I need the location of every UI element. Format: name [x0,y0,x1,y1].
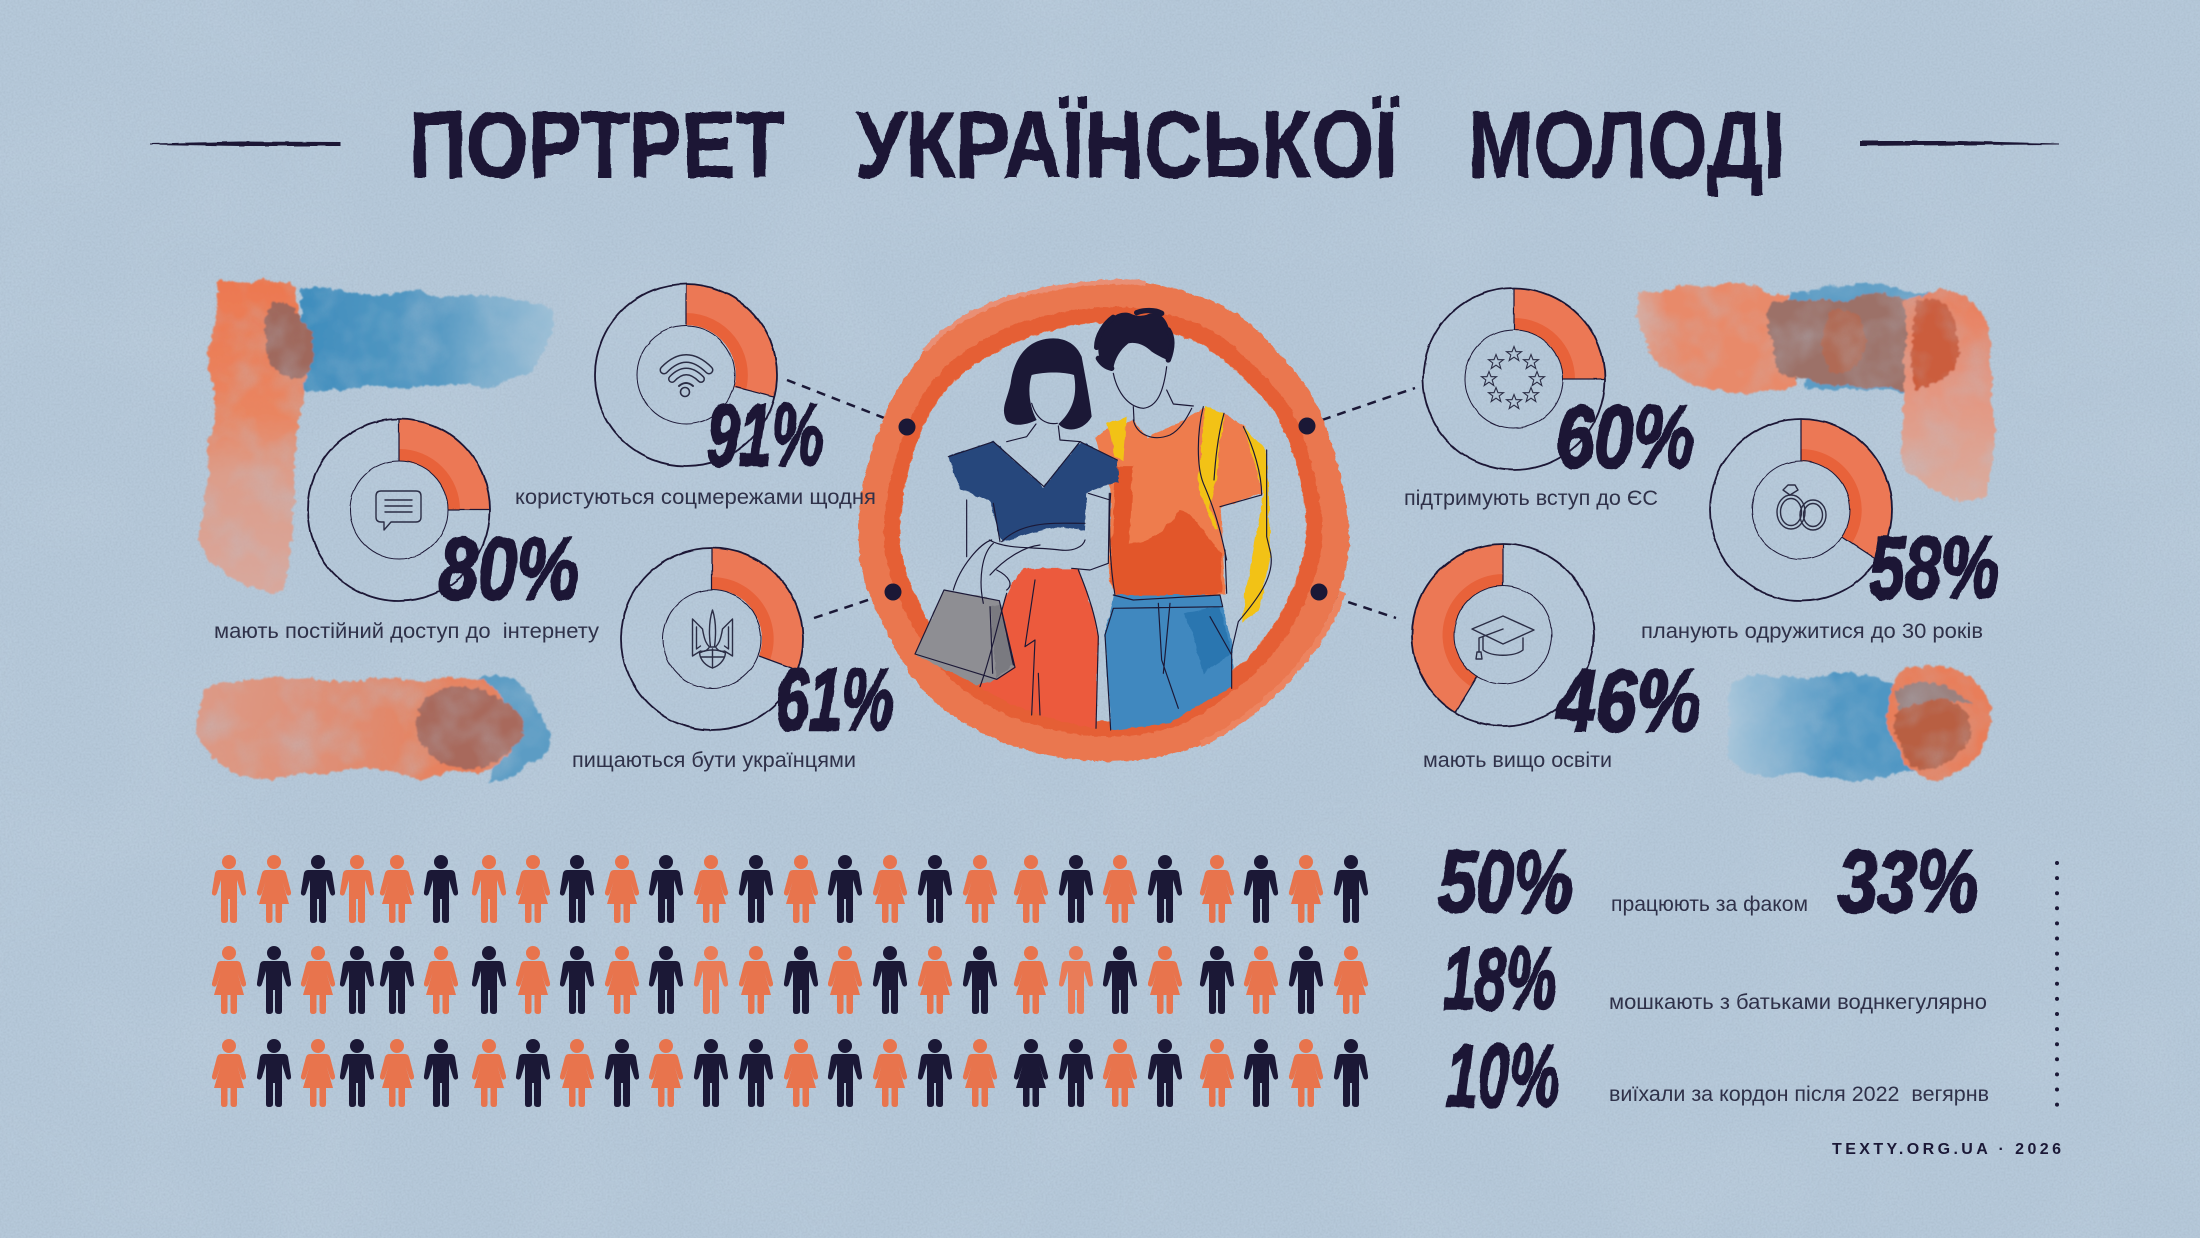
pictogram row 3 [212,1039,1368,1107]
title rule right [1860,141,2059,146]
central illustration: ring and couple [881,279,1340,745]
caption: social media: користуються соцмережами щодня [515,485,876,509]
watercolor: bottom right [1727,665,1990,780]
title [409,92,1785,197]
pictogram row 2 [212,946,1368,1014]
donut: pride 61% [621,548,803,730]
title rule left [150,142,340,146]
vertical dotted line [2055,863,2059,1105]
watercolor: top right [1634,284,1994,497]
stat: 91%: 91% [707,385,823,484]
stat: 10%: 10% [1446,1026,1560,1125]
stat: 80%: 80% [439,519,579,618]
brush ring [881,279,1340,745]
donut: internet 80% [308,419,490,601]
caption: pride: пищаються бути українцями [572,748,856,772]
stat: 58%: 58% [1869,518,1999,617]
dashed connector: education donut [1333,597,1396,618]
caption: marriage: планують одружитися до 30 років [1641,619,1983,643]
connector dot: upper left [898,418,916,436]
donut: marriage 58% [1710,419,1892,601]
source credit: TEXTY.ORG.UA · 2026 [1832,1141,2061,1158]
watercolor: top left [204,282,553,595]
title: ПОРТРЕТ [409,92,784,197]
title: МОЛОДІ [1468,92,1785,197]
title: УКРАЇНСЬКОЇ [855,92,1399,197]
connector dot: lower left [884,584,902,600]
ink outlines [1007,367,1193,442]
stat: 46%: 46% [1554,651,1701,750]
caption: EU: підтримують вступ до ЄС [1404,486,1658,510]
caption: moved abroad: виїхали за кордон після 2022 вегярнв [1609,1082,1989,1106]
stat: 61%: 61% [776,650,894,749]
pictogram row 1 [212,855,1368,923]
stat: 50%: 50% [1439,832,1573,931]
icon: wifi [664,358,709,396]
icon: trident [692,610,732,668]
hair [1004,338,1092,429]
donut: education 46% [1412,544,1594,726]
stat: 60%: 60% [1556,387,1695,486]
connector dot: lower right [1310,584,1328,600]
icon: graduation cap [1472,616,1534,659]
icon: EU stars [1482,346,1544,408]
donut: social media 91% [595,284,777,466]
caption: internet: мають постійний доступ до інтернету [214,619,599,643]
dashed connector: wifi donut [787,380,892,421]
caption: education: мають вищо освіти [1423,748,1612,772]
stat: 33%: 33% [1838,832,1979,931]
watercolor: bottom left [198,676,545,782]
caption: living with parents: мошкають з батьками воднкегулярно [1609,990,1987,1014]
stat: 18%: 18% [1443,929,1557,1028]
icon: speech bubble [376,491,421,530]
couple drawing [915,310,1271,731]
connector dot: upper right [1298,418,1316,434]
dashed connector: EU donut [1322,388,1415,420]
caption: work in field: працюють за факом [1611,892,1808,916]
dashed connector: trident donut [814,596,880,618]
colour washes [915,405,1271,731]
icon: wedding rings [1777,485,1826,530]
donut: EU 60% [1423,288,1605,470]
